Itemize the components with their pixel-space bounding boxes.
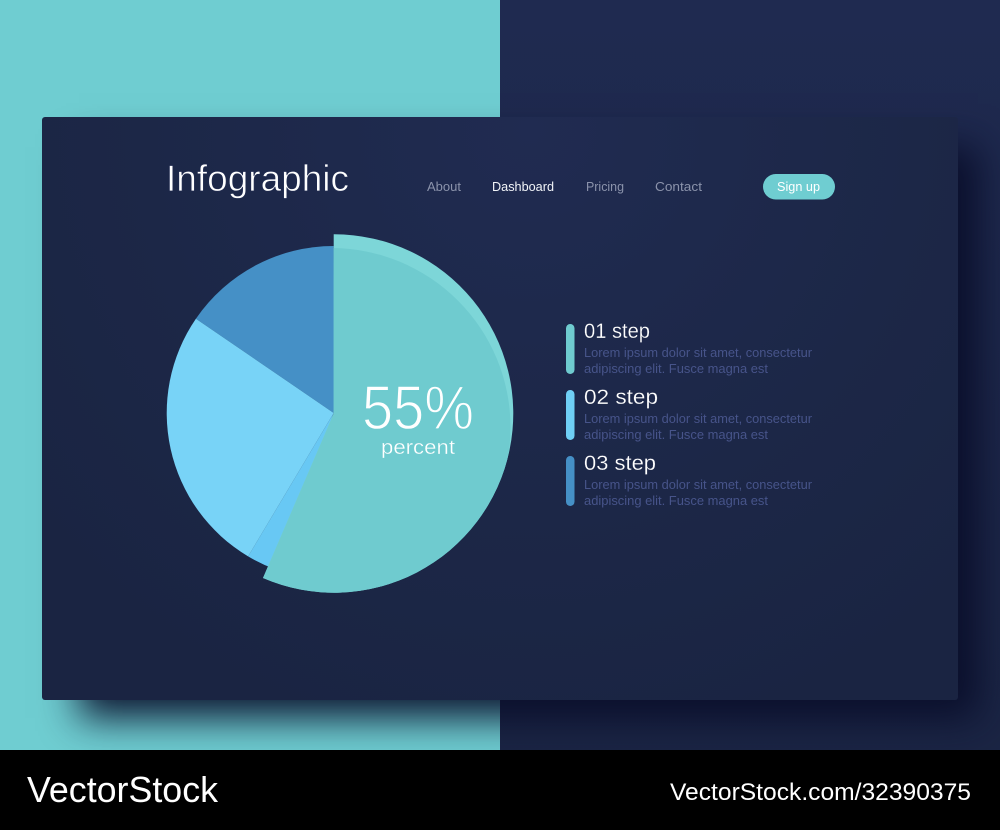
value label: 55%: 55% — [362, 374, 474, 443]
legend step 2: Lorem ipsum dolor sit amet, consectetur — [584, 412, 812, 426]
navigation — [427, 179, 702, 194]
legend step 2: adipiscing elit. Fusce magna est — [584, 428, 769, 442]
legend step 3: 03 step — [584, 452, 656, 475]
value caption: percent: percent — [381, 437, 455, 459]
pie chart — [152, 234, 513, 607]
nav: Contact: Contact — [655, 179, 702, 194]
footer image id: VectorStock.com/32390375 — [670, 779, 971, 806]
legend step 2 — [566, 386, 812, 442]
card shadow — [107, 175, 950, 690]
slice: teal 55% — [263, 248, 510, 593]
background: navy right half — [500, 0, 1000, 750]
sign up button — [763, 174, 835, 200]
legend step 2: 02 step — [584, 386, 658, 409]
slice: light blue — [167, 319, 334, 556]
legend step 1 — [566, 320, 812, 376]
footer bar — [0, 750, 1000, 830]
background: teal left half — [0, 0, 500, 750]
slice: mid blue sliver — [248, 413, 334, 569]
main card panel — [42, 117, 958, 700]
legend step 1: Lorem ipsum dolor sit amet, consectetur — [584, 346, 812, 360]
slice: teal highlight rim — [263, 234, 513, 593]
title: Infographic — [166, 158, 349, 199]
slice: dark blue — [196, 246, 335, 413]
legend step 3 — [566, 452, 812, 508]
legend step 3: Lorem ipsum dolor sit amet, consectetur — [584, 478, 812, 492]
legend step 3: adipiscing elit. Fusce magna est — [584, 494, 769, 508]
legend step 1: adipiscing elit. Fusce magna est — [584, 362, 769, 376]
nav: Pricing: Pricing — [586, 179, 624, 194]
sign up button: Sign up — [777, 179, 820, 194]
nav: Dashboard: Dashboard — [492, 179, 554, 194]
nav: About: About — [427, 179, 461, 194]
footer logo: VectorStock — [27, 769, 219, 810]
legend step 1: 01 step — [584, 320, 650, 343]
